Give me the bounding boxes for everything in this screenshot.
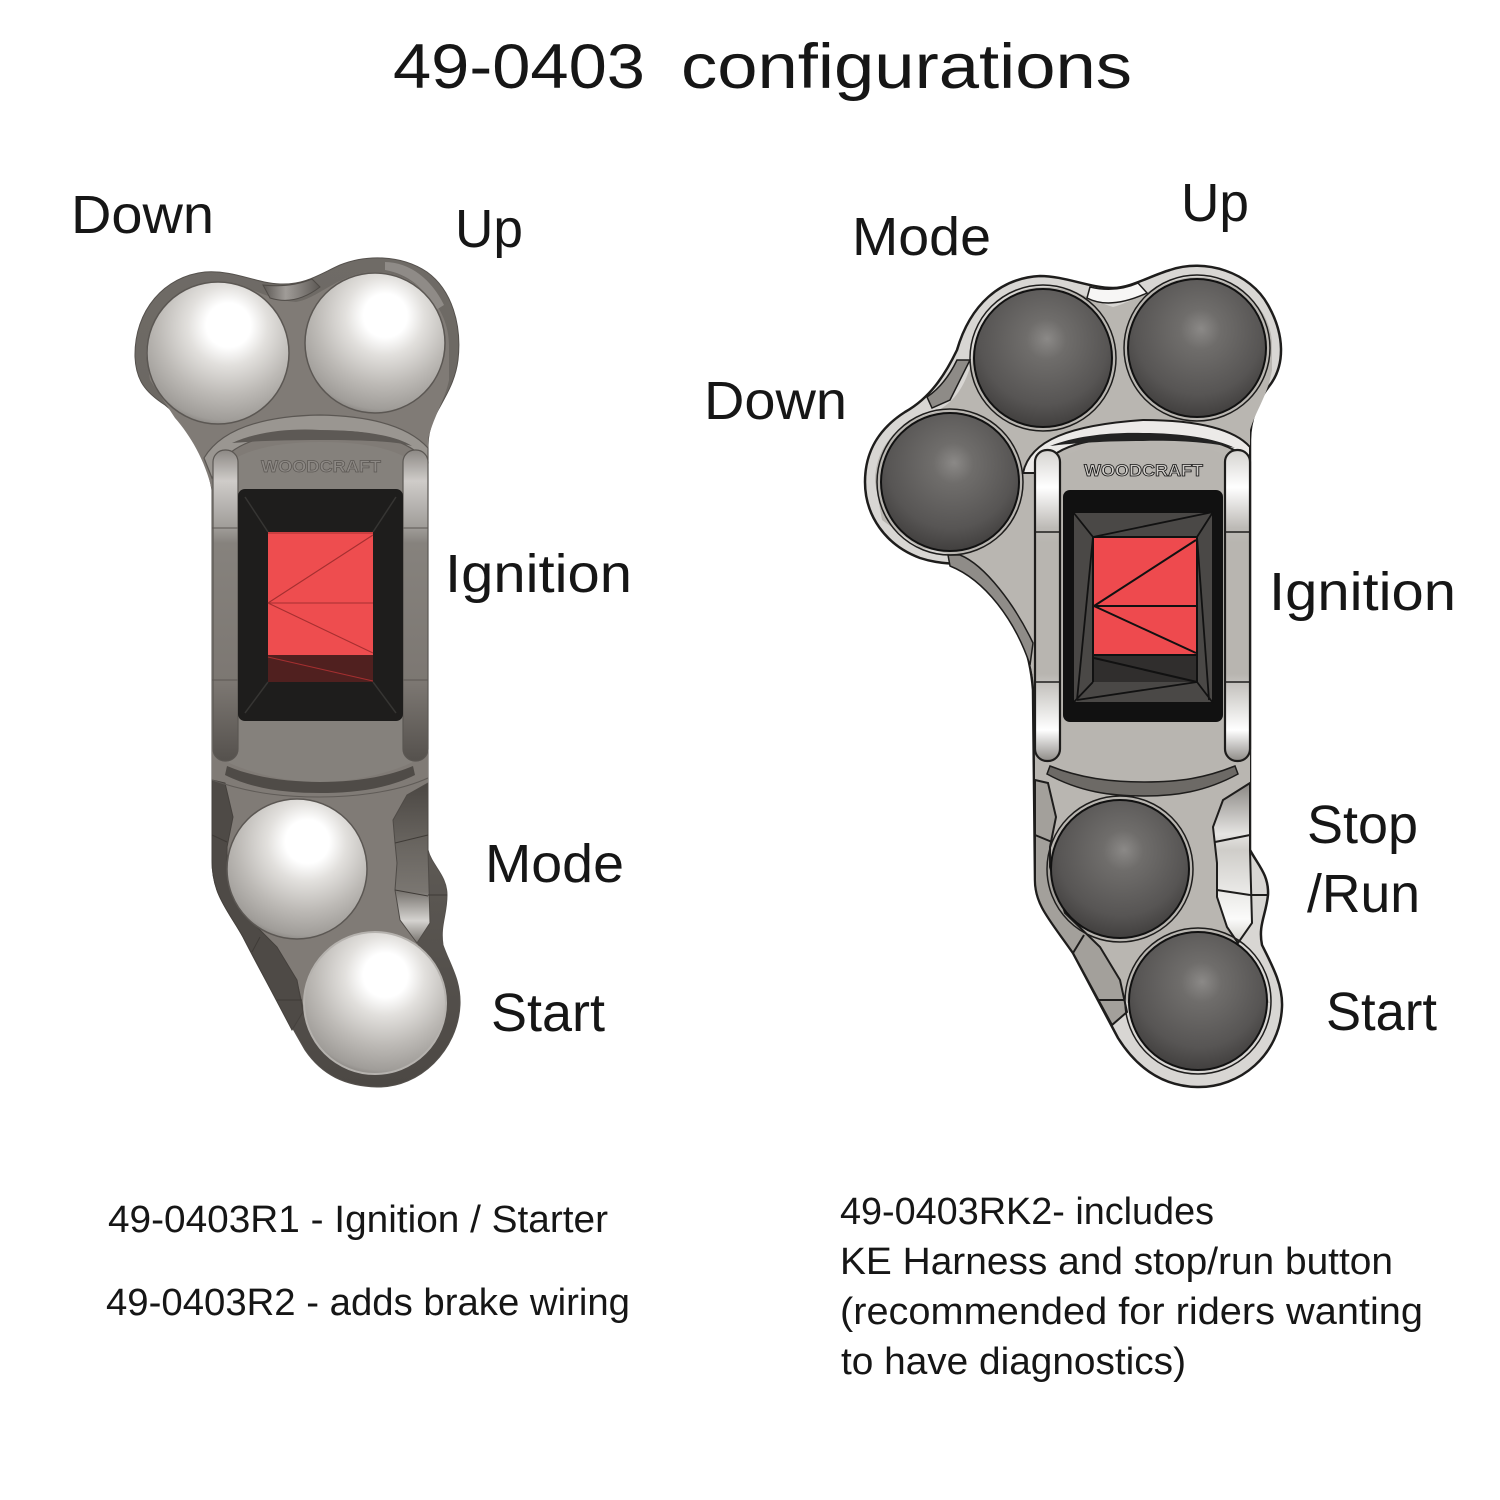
labels: left device: Up xyxy=(455,199,523,259)
text block: right configuration: (recommended for riders wanting xyxy=(840,1291,1423,1333)
right button rings xyxy=(877,275,1271,1074)
left button: start xyxy=(304,932,446,1074)
labels: right device: Ignition xyxy=(1269,562,1456,622)
labels: right device xyxy=(704,173,1456,1042)
right top web highlight xyxy=(1087,283,1147,303)
right lower-left lobe strip xyxy=(948,555,1033,665)
right rocker red face xyxy=(1093,537,1197,655)
left rocker switch frame xyxy=(238,489,403,721)
text block: right configuration: to have diagnostics) xyxy=(841,1341,1186,1383)
right lower arc xyxy=(1047,766,1238,796)
text block: left configurations xyxy=(106,1199,630,1324)
right housing body xyxy=(865,266,1282,1087)
labels: right device: Start xyxy=(1326,982,1437,1042)
device: right switch panel xyxy=(865,266,1282,1087)
left inner plate xyxy=(212,442,428,782)
labels: right device: Mode xyxy=(852,207,991,267)
right button: mode xyxy=(974,289,1112,427)
left rocker red face xyxy=(268,532,373,655)
right inner plate xyxy=(1035,442,1250,783)
left lower-right pocket xyxy=(393,783,430,943)
right rocker facets xyxy=(1093,537,1197,682)
right face plate xyxy=(875,277,1272,1003)
left slot lines xyxy=(212,528,428,680)
labels: right device: Up xyxy=(1181,173,1249,233)
labels: left device: Down xyxy=(71,185,214,245)
right rocker switch frame xyxy=(1063,490,1223,722)
labels: right device: Down xyxy=(704,371,847,431)
left button: up xyxy=(305,273,445,413)
left housing body xyxy=(135,258,460,1087)
right rocker bevel lines xyxy=(1073,512,1213,703)
left top web xyxy=(263,279,320,300)
left bezel inner ribbon xyxy=(232,430,412,446)
right button: stop/run xyxy=(1051,800,1189,938)
right pocket dividers xyxy=(1035,835,1268,1000)
text block: right configuration xyxy=(840,1191,1423,1383)
labels: left device: Start xyxy=(491,983,605,1043)
right logo: WOODCRAFT xyxy=(1084,461,1204,480)
left side slot two xyxy=(403,450,428,761)
right bezel inner ribbon xyxy=(1050,433,1235,448)
labels: right device: /Run xyxy=(1307,864,1420,924)
labels: left device xyxy=(71,185,632,1043)
title: configurations xyxy=(681,32,1132,102)
right side slot one xyxy=(1035,450,1060,761)
left rocker facets xyxy=(268,533,373,681)
title xyxy=(393,32,1132,102)
left pocket dividers xyxy=(212,835,447,1000)
text block: left configurations: 49-0403R1 - Ignition / Starter xyxy=(108,1199,608,1241)
right lower-right pocket xyxy=(1213,783,1252,943)
left lower arc line xyxy=(212,778,428,797)
right rocker bevel xyxy=(1073,512,1213,703)
right bezel arch xyxy=(1023,420,1250,473)
left logo: WOODCRAFT xyxy=(261,457,382,476)
left lower arc xyxy=(225,766,415,793)
left side slot one xyxy=(213,450,238,761)
text block: right configuration: 49-0403RK2- includes xyxy=(840,1191,1214,1233)
labels: right device: Stop xyxy=(1307,795,1418,855)
right side slot two xyxy=(1225,450,1250,761)
text block: right configuration: KE Harness and stop/run button xyxy=(840,1241,1393,1283)
labels: left device: Mode xyxy=(485,834,624,894)
left rocker bevels xyxy=(245,497,396,713)
left face plate xyxy=(146,272,449,1005)
left button: down xyxy=(147,282,289,424)
left button: mode xyxy=(227,799,367,939)
right upper-left lobe strip xyxy=(927,360,970,408)
right button: start xyxy=(1129,932,1267,1070)
labels: left device: Ignition xyxy=(445,544,632,604)
right lower-left pocket xyxy=(1035,780,1127,1025)
text block: left configurations: 49-0403R2 - adds brake wiring xyxy=(106,1282,630,1324)
left bezel arch xyxy=(204,415,428,478)
left rim highlight xyxy=(385,262,444,310)
right rocker dark lower face xyxy=(1093,655,1197,682)
right button: down xyxy=(881,413,1019,551)
right button: up xyxy=(1128,279,1266,417)
right slot lines xyxy=(1035,532,1250,682)
device: left switch panel xyxy=(135,258,460,1087)
left rocker dark lower face xyxy=(268,655,373,682)
title: 49-0403 xyxy=(393,32,645,102)
left lower-left pocket xyxy=(212,780,303,1030)
